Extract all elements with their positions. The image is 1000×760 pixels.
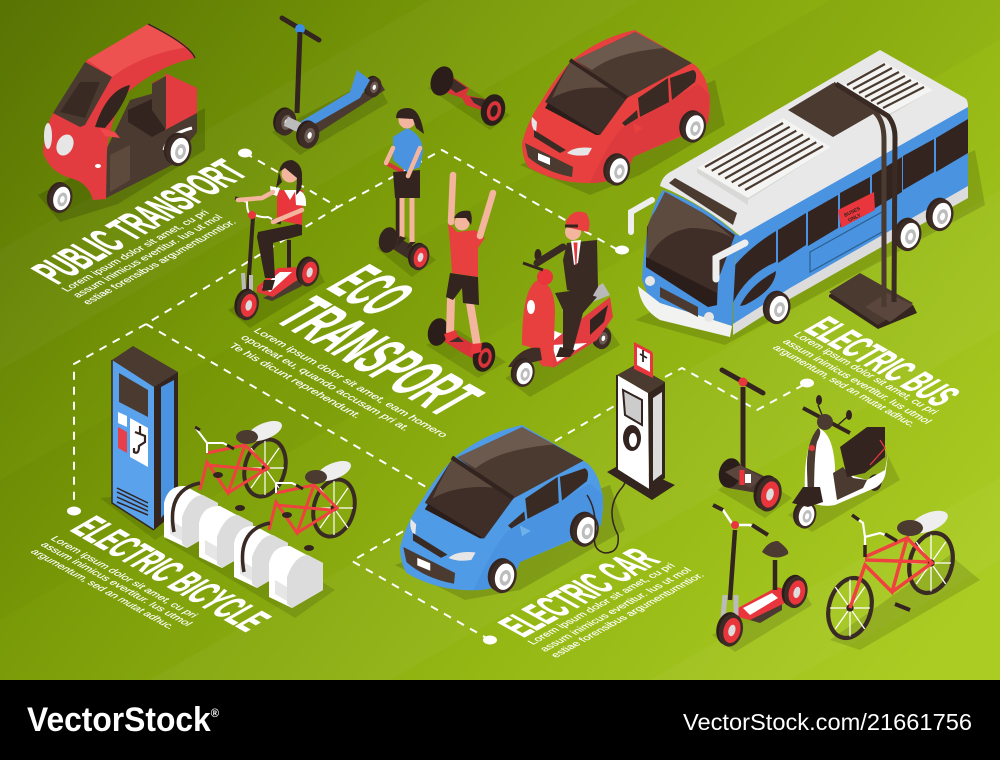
icon: blue charging station bbox=[100, 346, 195, 540]
text block: electric car: assum inimicus evertitur. Ius ut mol bbox=[537, 566, 695, 653]
icon: red car bbox=[520, 30, 725, 195]
text block: public transport: estiae forensibus argumentumntior. bbox=[80, 218, 239, 306]
text block: eco transport: Lorem ipsum dolor sit amet, eam homero bbox=[250, 327, 450, 439]
text block: eco transport: Te his dicunt reprehendunt. bbox=[225, 342, 364, 420]
text block: electric bicycle: argumentum, sed an mutat adhuc. bbox=[27, 548, 178, 631]
text block: electric bicycle: assum inimicus evertitur. Ius utmol bbox=[37, 541, 195, 628]
heading: eco transport: ECO bbox=[311, 256, 431, 325]
heading: electric car: ELECTRIC CAR bbox=[489, 542, 670, 643]
text block: electric bus: argumentum, sed an mutat adhuc. bbox=[769, 344, 919, 429]
icon: man on red moped bbox=[505, 212, 620, 397]
icon: pole charger bbox=[829, 84, 917, 329]
text block: electric bus: assum inimicus evertitur. Ius utmol bbox=[779, 338, 934, 426]
text block: electric bus: Lorem ipsum dolor sit amet, cu pri bbox=[790, 331, 941, 416]
icon: red tuk-tuk bbox=[38, 24, 205, 222]
footer url: VectorStock.com/21661756 bbox=[683, 709, 972, 735]
bicycle one bbox=[195, 417, 292, 511]
footer logo: ® bbox=[211, 706, 219, 720]
text block: eco transport: oporteat eu, quando accusam pri at. bbox=[237, 334, 412, 433]
icon: blue kick scooter bbox=[270, 18, 388, 155]
icon: segway bbox=[716, 370, 792, 518]
text block: public transport: Lorem ipsum dolor sit amet, cu pri bbox=[59, 209, 212, 293]
icon: woman on seated scooter bbox=[228, 160, 325, 328]
bicycle two bbox=[269, 457, 361, 551]
bus sign: BUSES bbox=[843, 206, 862, 219]
heading: eco transport: TRANSPORT bbox=[259, 288, 498, 426]
icon: car charger bbox=[607, 342, 675, 500]
footer logo: VectorStock bbox=[27, 701, 224, 739]
bus sign: ONLY bbox=[847, 212, 863, 224]
text block: electric car: estiae forensibus argumentumntior. bbox=[548, 571, 707, 659]
icon: blue car bbox=[395, 425, 628, 600]
heading: electric bicycle: ELECTRIC BICYCLE bbox=[60, 510, 280, 638]
text block: electric car: Lorem ipsum dolor sit amet, cu pri bbox=[525, 562, 678, 646]
icon: electric bus bbox=[631, 50, 985, 345]
heading: eco transport bbox=[259, 256, 498, 426]
text block: eco transport bbox=[225, 327, 450, 439]
heading: public transport: PUBLIC TRANSPORT bbox=[21, 153, 258, 290]
text block: electric bicycle: Lorem ipsum dolor sit amet, cu pri bbox=[47, 535, 200, 620]
dashed connector lines bbox=[74, 150, 807, 640]
footer bar bbox=[0, 680, 1000, 760]
icon: woman on segway bbox=[376, 108, 436, 277]
text block: public transport: assum inimicus evertitur. Ius ut mol bbox=[70, 213, 226, 299]
icon: hoverboard bbox=[427, 63, 510, 130]
icon: white motor scooter bbox=[788, 395, 900, 532]
bus sign bbox=[838, 192, 875, 228]
icon: kick scooter with seat bbox=[712, 505, 812, 652]
icon: bike rack and electric bicycles bbox=[164, 417, 361, 618]
icon: red bicycle bbox=[822, 506, 980, 650]
connector dots bbox=[67, 148, 814, 644]
icon: boy on hoverboard bbox=[425, 175, 506, 378]
